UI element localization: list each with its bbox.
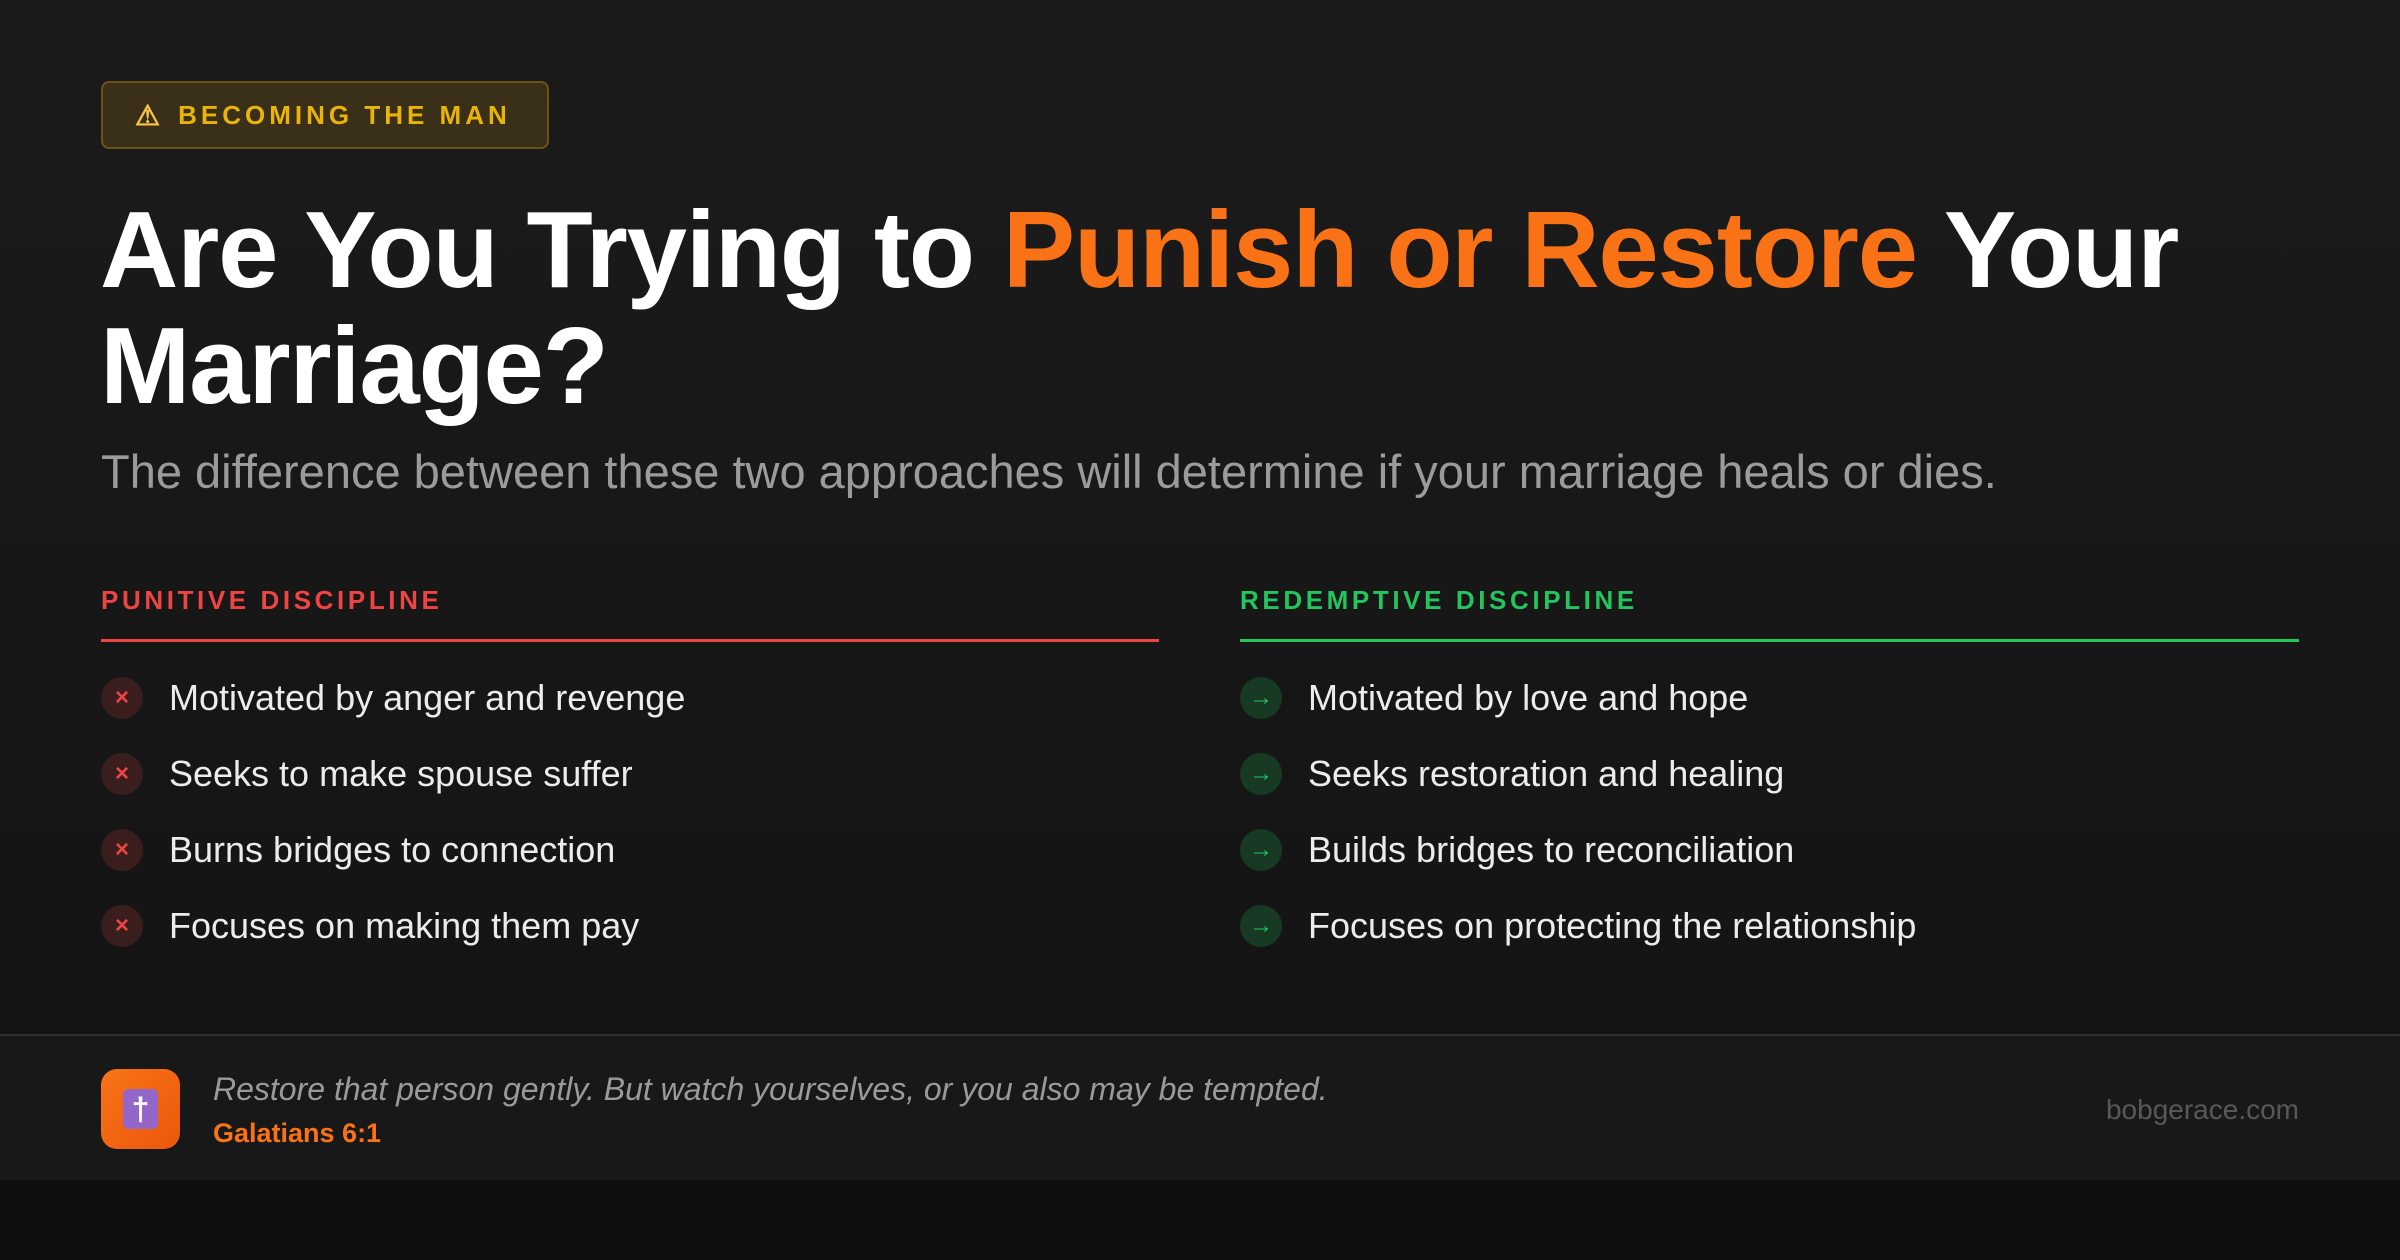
panel: redemptive xyxy=(1240,585,2299,947)
list: redemptive: → xyxy=(1249,684,1273,711)
icon: cross xyxy=(101,1069,180,1149)
subtitle: The difference between these two approaches will determine if your marriage heals or dies. xyxy=(101,445,1997,498)
list: redemptive: Focuses on protecting the relationship xyxy=(1308,905,1916,946)
list: punitive: × xyxy=(115,684,129,711)
title: Marriage? xyxy=(100,305,608,426)
list: redemptive: Seeks restoration and healing xyxy=(1308,753,1784,794)
list: punitive: Focuses on making them pay xyxy=(169,905,639,946)
list: punitive: × xyxy=(115,912,129,939)
icon: cross: † xyxy=(132,1091,149,1127)
list: redemptive: Motivated by love and hope xyxy=(1308,677,1748,718)
quote: Restore that person gently. But watch yourselves, or you also may be tempted. xyxy=(213,1071,1328,1107)
site: bobgerace.com xyxy=(2106,1094,2299,1125)
footer xyxy=(0,1034,2400,1180)
reference: Galatians 6:1 xyxy=(213,1118,381,1148)
heading: punitive: PUNITIVE DISCIPLINE xyxy=(101,585,442,615)
list: punitive: Motivated by anger and revenge xyxy=(169,677,685,718)
list: punitive xyxy=(101,677,685,947)
panel: punitive xyxy=(101,585,1159,947)
list: punitive: Burns bridges to connection xyxy=(169,829,615,870)
list: punitive: × xyxy=(115,760,129,787)
badge xyxy=(101,81,549,149)
list: punitive: Seeks to make spouse suffer xyxy=(169,753,633,794)
title: Are You Trying to Punish or Restore Your xyxy=(100,189,2178,310)
title xyxy=(100,189,2178,426)
heading: redemptive: REDEMPTIVE DISCIPLINE xyxy=(1240,585,1638,615)
badge: ⚠ xyxy=(135,100,164,130)
list: redemptive xyxy=(1240,677,1916,947)
list: redemptive: → xyxy=(1249,760,1273,787)
badge: BECOMING THE MAN xyxy=(178,100,511,130)
list: redemptive: Builds bridges to reconciliation xyxy=(1308,829,1794,870)
list: redemptive: → xyxy=(1249,836,1273,863)
list: punitive: × xyxy=(115,836,129,863)
list: redemptive: → xyxy=(1249,912,1273,939)
